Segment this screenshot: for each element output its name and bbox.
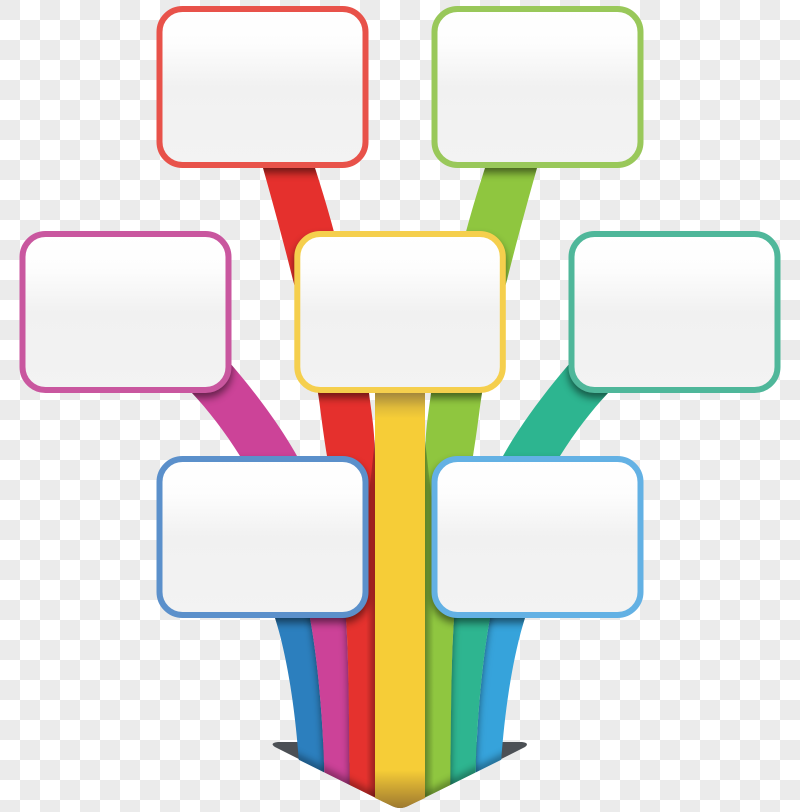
panel: magenta box	[22, 234, 228, 390]
ribbon: red	[263, 168, 375, 621]
ribbons: lower bundle into arrow	[275, 618, 525, 798]
ribbon shadow cast by yellow on green	[425, 440, 434, 797]
ribbon: magenta	[192, 365, 311, 622]
panel: blue box	[160, 459, 366, 615]
ribbon: light blue lower	[476, 618, 525, 772]
ribbon: magenta lower	[306, 618, 352, 786]
panel: yellow box	[297, 234, 503, 390]
ribbons: upper sections	[192, 168, 608, 622]
panel: green box	[434, 9, 640, 165]
ribbon: teal lower	[448, 618, 494, 786]
icon: dark arrow head	[273, 742, 527, 808]
panel: teal box	[572, 234, 778, 390]
ribbon: blue lower	[275, 618, 324, 772]
ribbon: green	[425, 168, 537, 590]
ribbon shadow cast by yellow on red	[366, 440, 375, 797]
ribbon: teal	[454, 364, 608, 622]
ribbon: green lower	[425, 617, 458, 798]
panel: red box	[160, 9, 366, 165]
ribbon: yellow centre	[375, 393, 425, 808]
ribbon: red lower	[341, 617, 375, 798]
arrow edge shading	[298, 750, 502, 798]
box shadows on ribbons	[192, 168, 608, 628]
panel: light blue box	[434, 459, 640, 615]
